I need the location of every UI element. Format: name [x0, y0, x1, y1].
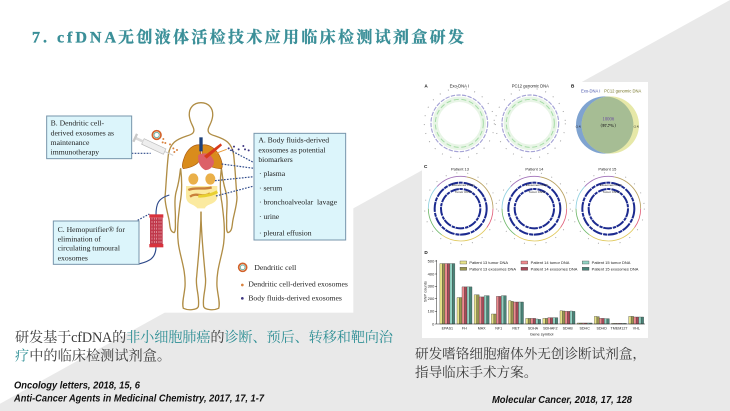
bar chart legend: Patient 13 tumor DNA	[469, 260, 508, 265]
axis labels: 0	[432, 321, 435, 326]
title: 无创液体活检技术应用临床检测试剂盒研发	[118, 28, 464, 46]
bar chart legend: Patient 14 exosomes DNA	[531, 266, 578, 271]
left description text	[15, 329, 394, 364]
left citations: Anti-Cancer Agents in Medicinal Chemistry, 2017, 17, 1-7	[13, 394, 265, 404]
axes	[435, 260, 645, 324]
icon: dendritic exosome dots	[162, 138, 178, 153]
axis labels: 200	[428, 296, 435, 301]
callout A: body fluids biomarkers	[254, 133, 346, 240]
body outline	[165, 103, 237, 310]
bar chart legend	[460, 260, 639, 271]
axis labels: FH	[462, 327, 467, 331]
axis labels: SDHAF2	[543, 327, 558, 331]
callout B: maintenance immunotherapy: immunotherapy	[51, 148, 99, 157]
chart C: patient circos plots: Exosomes CNVs	[452, 183, 475, 187]
callout A: body fluids biomarkers: A. Body fluids-derived	[258, 136, 329, 145]
axis labels: EPAS1	[442, 327, 453, 331]
callout C: hemopurifier: C. Hemopurifier® for	[58, 225, 125, 234]
axis labels: SDHB	[563, 327, 573, 331]
chart B: venn diagram: PC12 genomic DNA	[604, 88, 641, 93]
callout A: body fluids biomarkers: · urine	[259, 212, 280, 221]
chart C: patient circos plots: Patient 14	[525, 167, 544, 172]
axis labels: SDHA	[528, 327, 539, 331]
axis labels: SDHC	[579, 327, 590, 331]
axis labels: NF1	[495, 327, 502, 331]
axis labels: 100	[428, 309, 435, 314]
chart B: venn diagram: （97.7%）	[598, 123, 619, 128]
chart D: SNP counts bar chart: D	[424, 250, 428, 255]
panel: genomics figure	[422, 82, 648, 338]
axis labels: RET	[512, 327, 520, 331]
legend	[239, 263, 348, 303]
bar chart legend: Patient 15 tumor DNA	[592, 260, 631, 265]
chart C: patient circos plots: Tumor CNVs	[455, 190, 472, 194]
chart B: venn diagram: Exo-DNA I	[581, 88, 600, 93]
axis labels: SNP counts	[422, 281, 427, 302]
icon: dendritic cell	[152, 131, 161, 139]
bar chart legend: Patient 13 exosomes DNA	[469, 266, 516, 271]
title: 7. cfDNA	[32, 30, 116, 46]
right description text: 研发嗜铬细胞瘤体外无创诊断试剂盒，	[415, 346, 646, 362]
chart A: circos plots	[424, 83, 565, 158]
left description text: 疗中的临床检测试剂盒。	[15, 348, 171, 364]
axis labels: TMEM127	[611, 327, 627, 331]
chart A: circos plots: A	[424, 84, 428, 89]
left citations: Oncology letters, 2018, 15, 6	[14, 380, 141, 392]
axis labels	[422, 258, 640, 337]
icon: syringe	[132, 133, 175, 159]
chart B: venn diagram	[571, 84, 641, 154]
chart C: patient circos plots	[424, 164, 644, 245]
chart B: venn diagram: (1.4)	[634, 124, 639, 128]
chart B: venn diagram: B	[571, 84, 575, 89]
callout A: body fluids biomarkers: biomarkers	[258, 155, 293, 164]
callout C: hemopurifier: exosomes	[58, 253, 88, 262]
legend: Dendritic cell-derived exosomes	[248, 280, 348, 289]
axis labels: VHL	[633, 327, 640, 331]
dotted connector lines	[132, 150, 254, 222]
chart A: circos plots: Exo-DNA I	[450, 83, 469, 88]
left description text: 研发基于cfDNA的非小细胞肺癌的诊断、预后、转移和靶向治	[15, 329, 394, 346]
legend: Body fluids-derived exosomes	[248, 294, 342, 303]
chart C: patient circos plots: Exosomes CNVs	[526, 183, 549, 187]
callout A: body fluids biomarkers: · pleural effusion	[259, 228, 312, 237]
icon: body fluid exosome dots	[228, 145, 250, 151]
chart B: venn diagram: 10006	[603, 118, 615, 123]
chart B: venn diagram: (1.4)	[576, 124, 581, 128]
right description text	[415, 346, 646, 380]
chart D: SNP counts bar chart	[422, 250, 645, 337]
right description text: 指导临床手术方案。	[415, 364, 537, 380]
chart C: patient circos plots: Tumor CNVs	[528, 190, 546, 194]
callout A: body fluids biomarkers: · plasma	[259, 169, 286, 178]
callout B: maintenance immunotherapy: B. Dendritic cell-	[51, 119, 104, 128]
callout B: maintenance immunotherapy	[47, 116, 132, 159]
axis labels: MAX	[478, 327, 486, 331]
chart C: patient circos plots: Exosomes CNVs	[600, 183, 623, 187]
bar chart legend: Patient 14 tumor DNA	[531, 260, 570, 265]
panel: exosome body diagram	[30, 90, 353, 313]
bars	[440, 264, 644, 324]
callout B: maintenance immunotherapy: derived exosomes as	[51, 129, 114, 138]
axis labels: 400	[428, 271, 435, 276]
callout C: hemopurifier: elimination of	[58, 234, 101, 243]
axis labels: Gene symbol	[530, 332, 554, 337]
callout A: body fluids biomarkers: · serum	[259, 183, 282, 192]
left citations	[13, 380, 265, 404]
callout A: body fluids biomarkers: · bronchoalveolar lavage	[259, 198, 338, 207]
legend: Dendritic cell	[254, 263, 296, 272]
callout B: maintenance immunotherapy: maintenance	[51, 138, 90, 147]
chart A: circos plots: PC12 genomic DNA	[512, 83, 549, 88]
chart C: patient circos plots: C	[424, 164, 428, 169]
right citation: Molecular Cancer, 2018, 17, 128	[492, 395, 633, 406]
callout C: hemopurifier: circulating tumoural	[58, 244, 120, 253]
chart C: patient circos plots: Tumor CNVs	[602, 190, 620, 194]
axis labels: 500	[428, 258, 435, 263]
callout A: body fluids biomarkers: exosomes as potential	[258, 145, 326, 154]
chart C: patient circos plots: Patient 15	[598, 167, 617, 172]
bar chart legend: Patient 15 exosomes DNA	[592, 266, 639, 271]
axis labels: SDHD	[596, 327, 607, 331]
organs: lungs, heart, kidneys, intestine	[182, 137, 227, 208]
axis labels: 300	[428, 284, 435, 289]
icon: hemopurifier filter	[139, 195, 169, 264]
chart C: patient circos plots: Patient 13	[451, 167, 470, 172]
callout C: hemopurifier	[53, 221, 139, 264]
